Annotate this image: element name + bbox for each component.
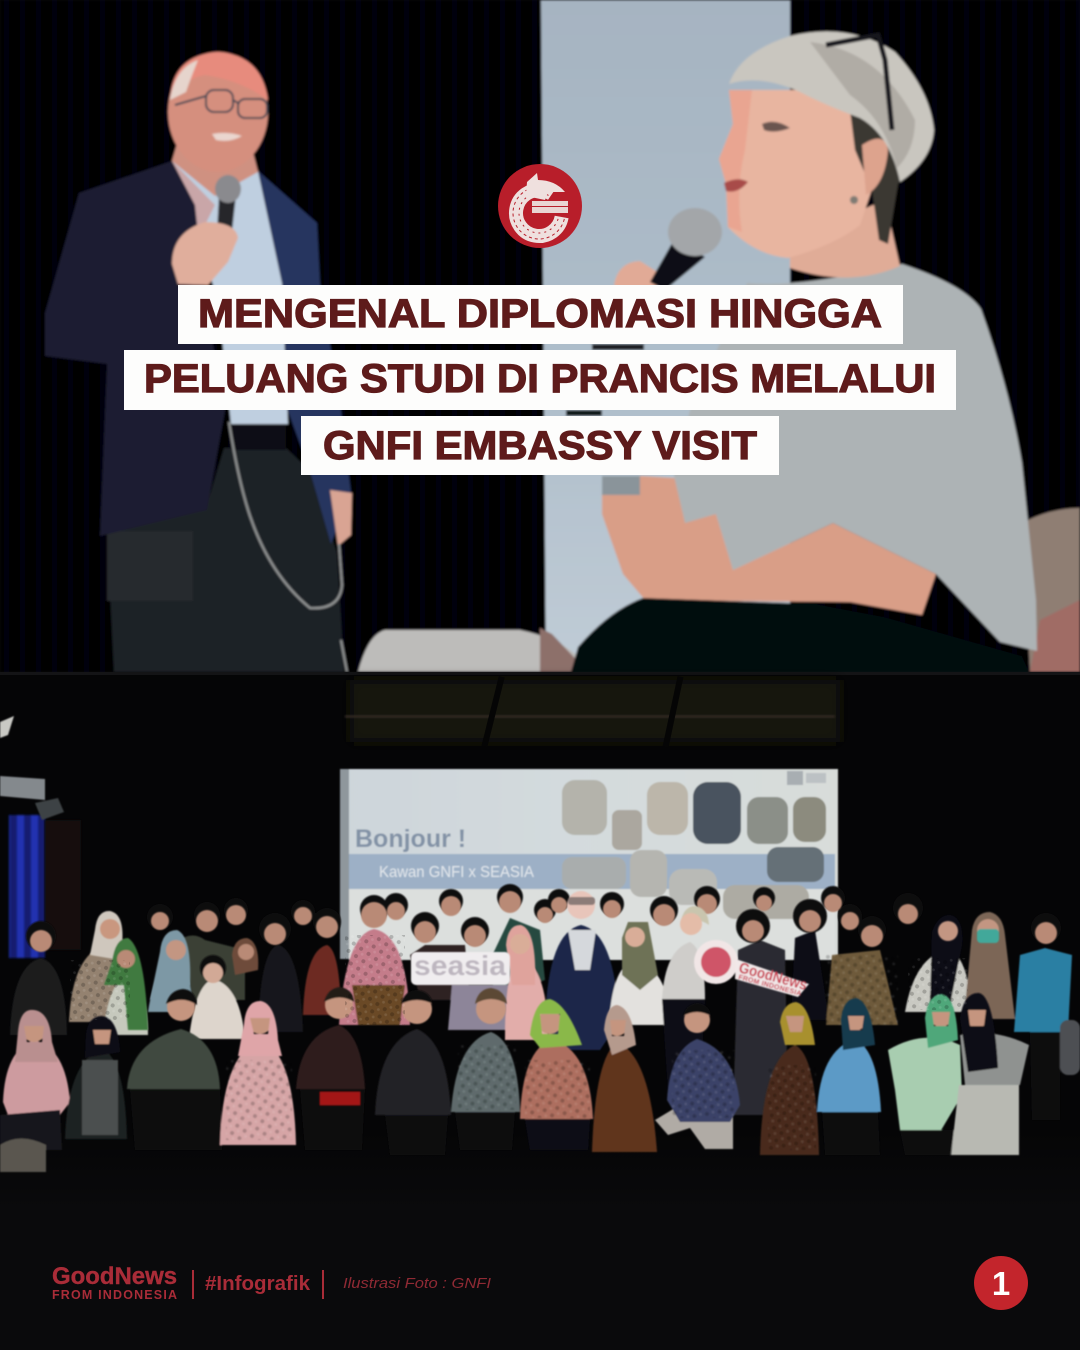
ear and earring — [862, 139, 888, 195]
pale wall panel — [541, 0, 790, 672]
top divider — [0, 672, 1080, 675]
group of people: back rows — [10, 912, 1080, 1120]
neck — [790, 200, 900, 278]
mouth and eye — [724, 179, 748, 192]
screen heading: Bonjour ! — [355, 825, 466, 853]
group of people: back row hair — [26, 884, 1061, 951]
screen subheading: Kawan GNFI x SEASIA — [379, 864, 534, 881]
ceiling — [345, 676, 840, 748]
batik patterns on back row — [70, 935, 968, 1025]
hijabs and hair — [15, 1010, 58, 1062]
face — [719, 90, 885, 258]
glasses — [175, 90, 267, 118]
dark under-hair — [850, 110, 925, 244]
title line 1: MENGENAL DIPLOMASI HINGGA — [198, 292, 882, 336]
belt — [231, 424, 286, 450]
sign text: GoodNews — [737, 959, 809, 994]
footer — [52, 1256, 1028, 1310]
mic cable — [229, 422, 347, 672]
brand logotype: GoodNews — [52, 1263, 177, 1290]
hair — [729, 32, 934, 182]
sunglasses — [826, 35, 892, 130]
sign: seasia — [411, 950, 510, 985]
divider — [192, 1270, 194, 1299]
woman with microphone — [358, 32, 1080, 672]
page number badge: 1 — [992, 1265, 1010, 1302]
spotlight — [0, 716, 64, 820]
title line 1 — [178, 285, 903, 344]
trousers — [107, 448, 344, 672]
group of people: back row faces — [30, 891, 1057, 952]
hand and mic — [614, 261, 662, 292]
chairs — [358, 630, 592, 672]
blue curtain — [9, 815, 45, 958]
photo credit: Ilustrasi Foto : GNFI — [343, 1275, 491, 1292]
photo: group photo on stage — [0, 672, 1080, 1212]
brand logotype: FROM INDONESIA — [52, 1288, 177, 1302]
shirt — [172, 161, 288, 424]
blazer — [45, 161, 225, 536]
heads — [22, 991, 988, 1046]
sign: GoodNews: FROM INDONESIA — [737, 974, 802, 998]
man in blazer — [45, 52, 352, 672]
forearm resting on lap — [602, 476, 936, 615]
page number badge — [974, 1256, 1028, 1310]
group of people: back row hijabs and highlighted guests — [90, 891, 999, 1030]
curtain backdrop — [0, 0, 1080, 672]
sign text: seasia — [414, 950, 506, 981]
title line 3: GNFI EMBASSY VISIT — [323, 424, 757, 468]
hashtag: #Infografik — [205, 1273, 311, 1295]
divider — [322, 1270, 324, 1299]
projection screen — [340, 769, 838, 960]
title — [124, 285, 956, 475]
brand logotype — [52, 1263, 177, 1302]
photo: speakers on stage — [0, 0, 1080, 672]
neck and head — [172, 140, 258, 196]
sign: GoodNews — [694, 940, 809, 998]
logo: GNFI badge — [498, 164, 582, 248]
hand — [172, 222, 238, 285]
title line 2 — [124, 350, 956, 410]
title line 3 — [301, 416, 779, 475]
microphone — [217, 195, 236, 232]
screen photo collage — [562, 780, 826, 919]
sweater — [674, 264, 1037, 651]
stage background — [0, 672, 1080, 1212]
trousers — [571, 598, 1029, 672]
title line 2: PELUANG STUDI DI PRANCIS MELALUI — [144, 357, 936, 401]
group of people: front row — [0, 987, 1029, 1172]
